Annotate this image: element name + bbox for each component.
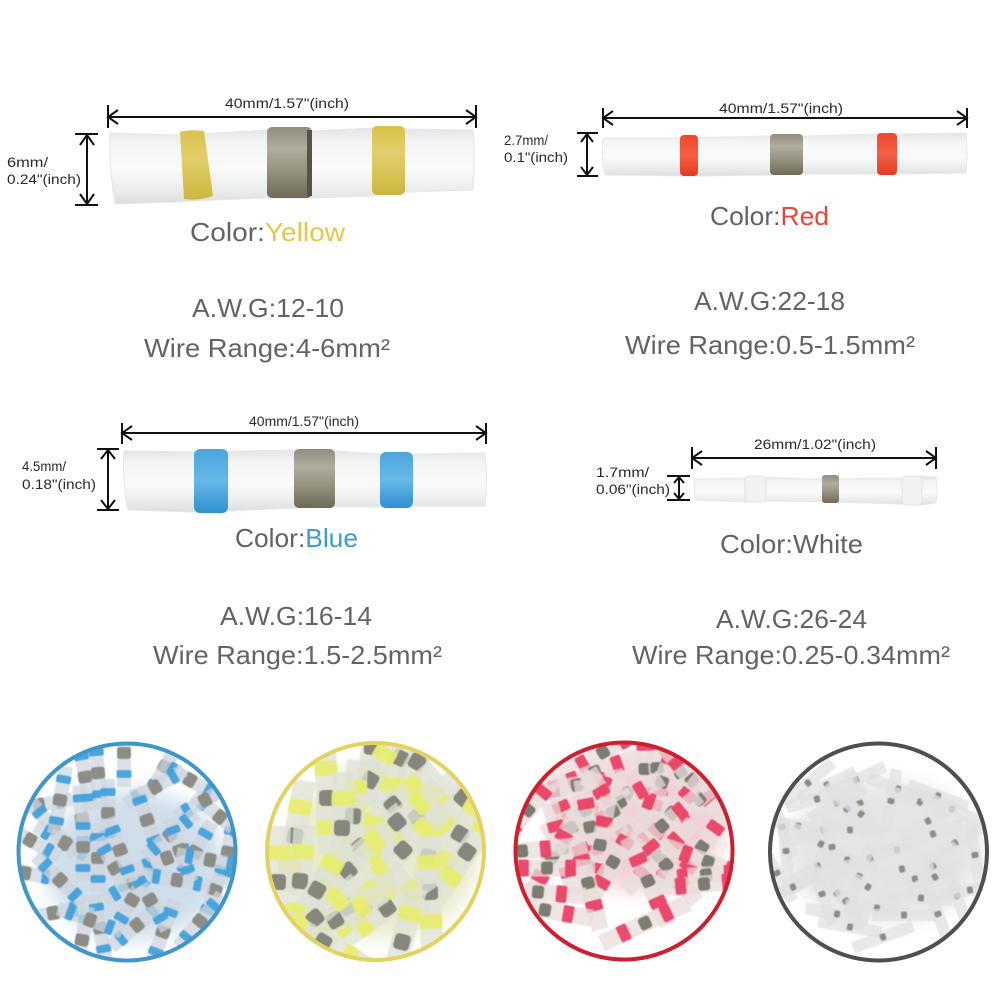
dimension: diameter: 0.18"(inch): [22, 477, 96, 492]
color label: Color:Red: [710, 201, 829, 231]
photo circle: yellow connectors: [265, 741, 486, 962]
dimension: diameter: [596, 465, 690, 500]
dimension: length: 40mm/1.57"(inch): [249, 414, 359, 429]
dimension: diameter: [7, 134, 98, 205]
color label: Color:White: [720, 529, 863, 559]
connector: blue tube: [124, 449, 486, 513]
dimension: diameter: 2.7mm/: [504, 133, 548, 148]
panel: yellow connector: [7, 96, 476, 363]
wire spec: Wire Range:4-6mm²: [144, 333, 390, 363]
wire spec: Wire Range:0.5-1.5mm²: [625, 330, 915, 360]
wire spec: [153, 601, 442, 670]
dimension: length: [122, 414, 486, 444]
wire spec: A.W.G:12-10: [192, 293, 344, 323]
connector: red tube: [602, 133, 967, 176]
photo circle: blue connectors: [16, 742, 238, 962]
connector: yellow tube: [110, 126, 474, 204]
dimension: length: 26mm/1.02"(inch): [754, 437, 876, 452]
dimension: length: 40mm/1.57"(inch): [719, 101, 843, 116]
dimension: diameter: [22, 449, 119, 510]
photo circle: red connectors: [514, 740, 734, 962]
dimension: diameter: 1.7mm/: [596, 465, 649, 480]
wire spec: [632, 604, 950, 670]
panel: white connector: [596, 437, 950, 670]
wire spec: [144, 293, 390, 363]
dimension: diameter: 6mm/: [7, 155, 48, 170]
photo circle: white connectors: [756, 744, 1000, 960]
dimension: length: 40mm/1.57"(inch): [225, 96, 349, 111]
dimension: length: [692, 437, 936, 469]
wire spec: A.W.G:22-18: [694, 286, 845, 316]
dimension: diameter: 0.1"(inch): [504, 150, 568, 165]
dimension: length: [603, 101, 967, 128]
dimension: diameter: [504, 133, 598, 176]
dimension: diameter: 4.5mm/: [22, 459, 66, 474]
connector: white tube: [694, 475, 937, 505]
wire spec: A.W.G:26-24: [716, 604, 867, 634]
wire spec: Wire Range:0.25-0.34mm²: [632, 640, 950, 670]
dimension: length: [108, 96, 476, 128]
panel: blue connector: [22, 414, 486, 670]
wire spec: A.W.G:16-14: [220, 601, 372, 631]
wire spec: [625, 286, 915, 360]
color label: Color:Yellow: [190, 217, 345, 247]
wire spec: Wire Range:1.5-2.5mm²: [153, 640, 442, 670]
color label: Color:Blue: [235, 523, 358, 553]
dimension: diameter: 0.24"(inch): [7, 172, 81, 187]
dimension: diameter: 0.06"(inch): [596, 482, 670, 497]
panel: red connector: [504, 101, 967, 360]
